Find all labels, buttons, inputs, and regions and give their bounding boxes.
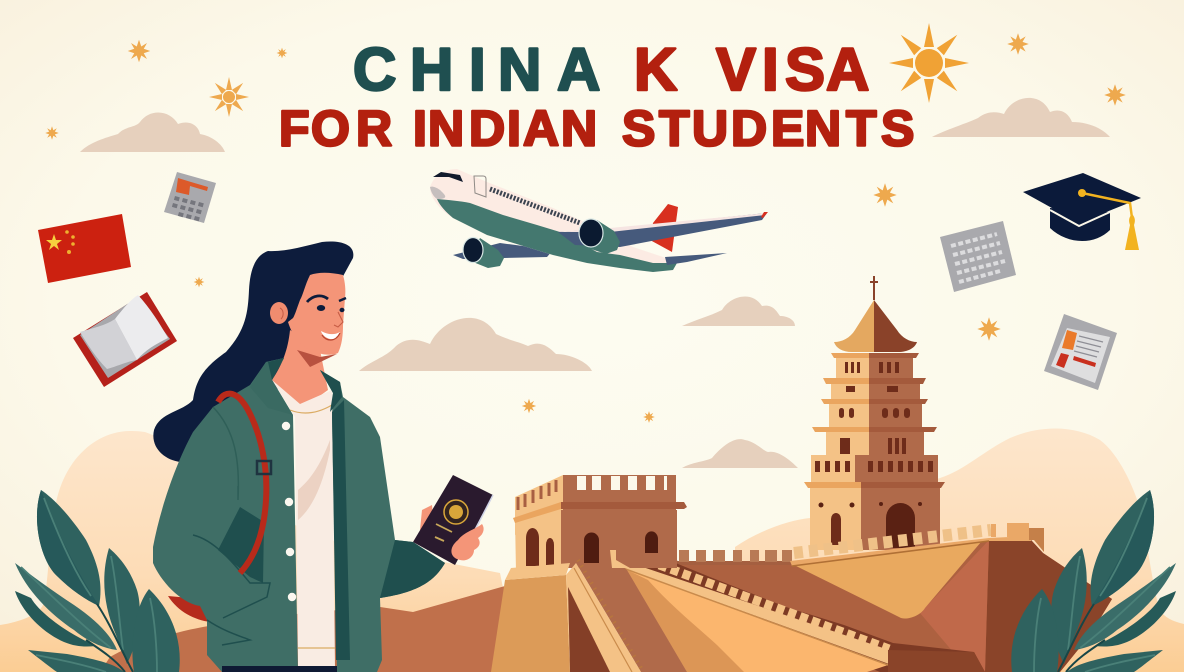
ear — [270, 302, 288, 324]
shirt — [272, 380, 335, 668]
character: student — [153, 242, 493, 672]
background hills — [0, 428, 1184, 672]
leaves: right — [1011, 490, 1176, 672]
tower doors — [886, 503, 915, 548]
far battlements — [677, 523, 1044, 566]
backpack strap — [218, 394, 266, 573]
illustration: Great Wall — [491, 475, 1112, 672]
backpack — [168, 596, 212, 622]
neck — [272, 330, 328, 410]
face — [288, 273, 345, 355]
hand — [451, 524, 484, 560]
icon: China flag — [38, 214, 131, 283]
title — [279, 36, 914, 156]
wall masses — [640, 540, 1112, 672]
lower wall main face — [610, 553, 985, 672]
illustration: airplane — [430, 169, 768, 272]
icon: calendar card — [164, 172, 216, 223]
decorative stars — [45, 33, 1126, 423]
title: FOR INDIAN STUDENTS — [279, 100, 914, 156]
jacket buttons — [282, 422, 296, 601]
near walkway — [576, 563, 687, 672]
illustration: tower — [804, 276, 945, 550]
gatehouse base — [491, 575, 570, 672]
tower spire — [870, 276, 878, 300]
icon: form document — [1044, 314, 1117, 390]
icon: open book — [73, 292, 177, 387]
leaves: left — [15, 490, 180, 672]
icon: document grid — [940, 221, 1016, 292]
jacket right — [320, 370, 445, 672]
icon: large sun — [889, 23, 969, 103]
clouds — [80, 98, 1110, 468]
icon: small sun — [209, 77, 249, 117]
hair — [153, 242, 353, 462]
passport — [420, 505, 434, 530]
jacket left — [153, 358, 298, 672]
icon: graduation cap — [1023, 173, 1141, 250]
gatehouse — [515, 475, 563, 535]
title: CHINA K VISA — [353, 36, 869, 103]
trousers — [222, 666, 337, 672]
